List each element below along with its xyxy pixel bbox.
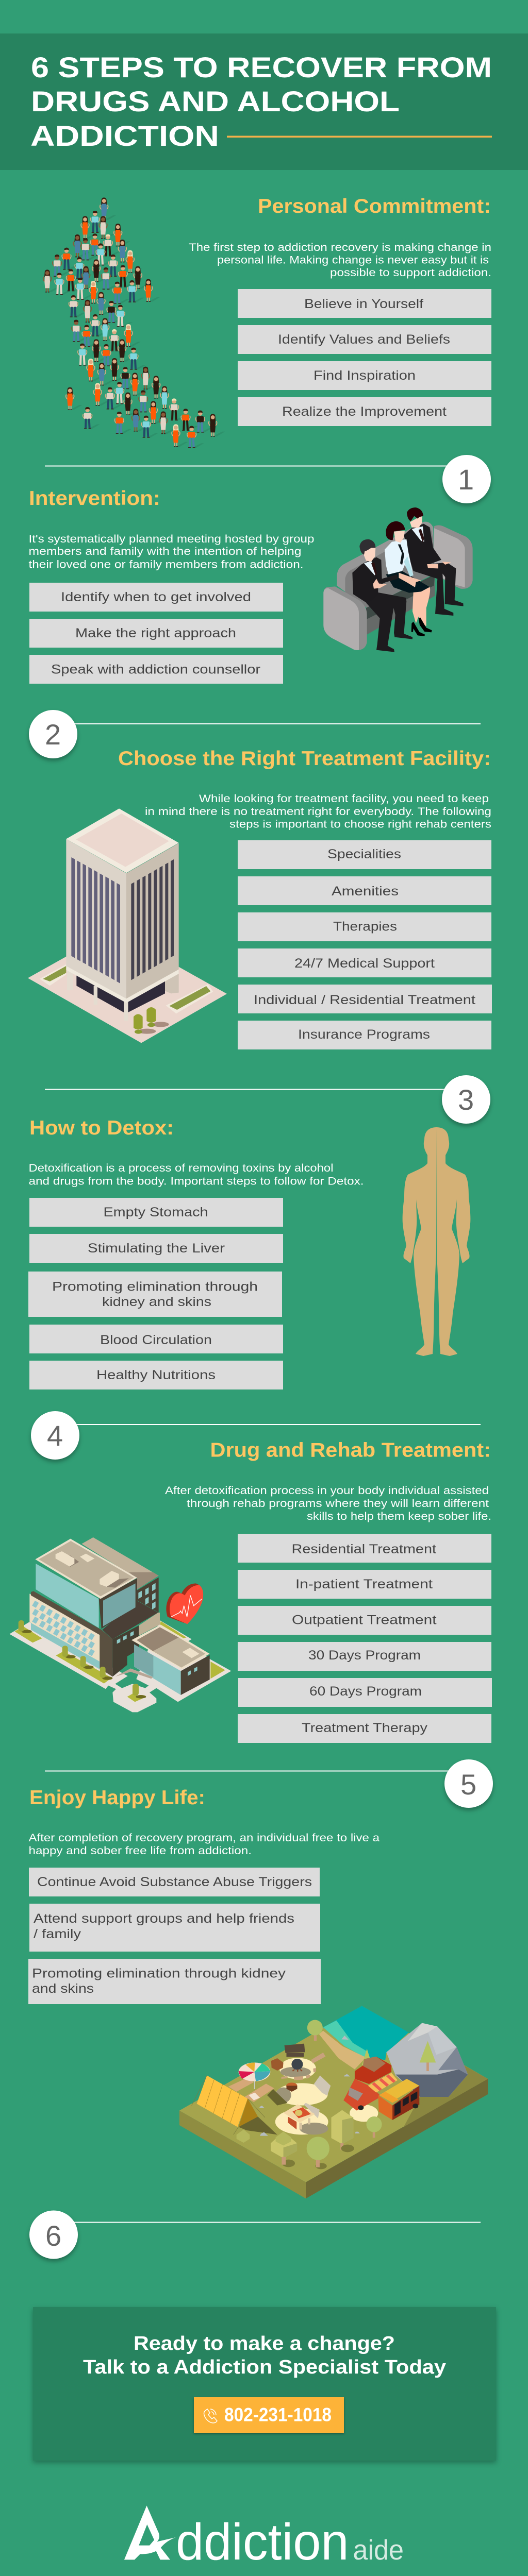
intro text: happy and sober free life from addiction.	[29, 1845, 252, 1857]
list button: Outpatient Treatment	[292, 1613, 437, 1627]
illustration: isometric camp site	[179, 2006, 488, 2198]
intro text: It's systematically planned meeting hosted by group	[29, 533, 315, 545]
intro text	[145, 793, 491, 831]
list button	[238, 1606, 491, 1635]
list button: Residential Treatment	[292, 1542, 436, 1556]
list button: Attend support groups and help friends	[34, 1911, 294, 1926]
list button	[28, 1272, 282, 1317]
heading: personal commitment: Personal Commitment:	[258, 195, 491, 217]
list button	[238, 985, 492, 1013]
list button: Realize the Improvement	[282, 404, 447, 419]
list button: kidney and skins	[102, 1295, 211, 1309]
panel: personal commitment	[43, 195, 491, 448]
list button	[238, 325, 491, 354]
list button	[238, 1642, 491, 1671]
list button	[238, 1678, 492, 1707]
list button: Promoting elimination through kidney	[32, 1966, 286, 1980]
list button	[238, 1534, 491, 1563]
intro text: steps is important to choose right rehab centers	[229, 818, 491, 831]
list button: and skins	[32, 1981, 94, 1996]
step 2 marker: 2	[45, 718, 61, 751]
list button: Stimulating the Liver	[88, 1241, 225, 1256]
step 1 marker: 1	[458, 463, 474, 496]
header band	[0, 33, 528, 170]
heading: drug and rehab treatment: Drug and Rehab Treatment:	[210, 1439, 491, 1461]
list button: In-patient Treatment	[295, 1577, 433, 1591]
illustration: hospital building with heart	[9, 1537, 231, 1712]
step 5 marker	[45, 1759, 493, 1808]
list button: Specialities	[327, 847, 401, 861]
step 5 marker: 5	[460, 1768, 476, 1801]
intro text: The first step to addiction recovery is making change in	[189, 242, 491, 253]
step 3 marker: 3	[458, 1083, 474, 1116]
list button	[238, 1570, 491, 1599]
title	[30, 51, 492, 152]
list button: Empty Stomach	[103, 1205, 208, 1219]
phone button	[194, 2397, 344, 2433]
list button: Individual / Residential Treatment	[254, 993, 475, 1007]
list button: Treatment Therapy	[302, 1721, 428, 1735]
heading: treatment facility: Choose the Right Treatment Facility:	[118, 748, 491, 770]
panel: how to detox	[28, 1117, 470, 1389]
title: DRUGS AND ALCOHOL	[31, 85, 400, 117]
title: 6 STEPS TO RECOVER FROM	[31, 51, 492, 83]
intro text: personal life. Making change is never easy but it is	[217, 255, 489, 266]
list button	[238, 1021, 491, 1049]
list button: Make the right approach	[75, 626, 236, 640]
step 1 marker	[45, 455, 491, 503]
intro text: members and family with the intention of helping	[29, 546, 301, 557]
intro text: After completion of recovery program, an individual free to live a	[29, 1832, 380, 1844]
list button: Blood Circulation	[100, 1333, 212, 1347]
panel: intervention	[29, 487, 473, 684]
list button	[29, 1904, 320, 1952]
intro text: through rehab programs where they will learn different	[187, 1498, 489, 1510]
logo: addiction aide: aide	[353, 2534, 404, 2566]
list button: 60 Days Program	[309, 1684, 422, 1699]
intro text: While looking for treatment facility, you need to keep	[199, 793, 489, 805]
intro text	[29, 533, 315, 571]
intro text	[189, 242, 491, 279]
list button	[29, 1361, 283, 1389]
logo mark: letter A	[124, 2505, 176, 2560]
list button: 24/7 Medical Support	[294, 956, 435, 971]
intro text: in mind there is no treatment right for everybody. The following	[145, 806, 491, 818]
heading: intervention: Intervention:	[29, 487, 160, 510]
list button	[29, 655, 283, 684]
step 3 marker	[45, 1075, 490, 1124]
call to action text: Ready to make a change?	[134, 2333, 395, 2354]
list button: Identify Values and Beliefs	[278, 332, 450, 347]
intro text	[29, 1162, 364, 1187]
illustration: three people on a sofa	[323, 507, 473, 652]
list button: / family	[34, 1927, 81, 1941]
list button	[238, 840, 491, 869]
illustration: office tower	[28, 808, 227, 1043]
logo: addiction aide: ddiction	[176, 2513, 349, 2571]
intro text: and drugs from the body. Important steps to follow for Detox.	[29, 1176, 364, 1187]
list button: 30 Days Program	[308, 1648, 421, 1663]
intro text	[29, 1832, 380, 1857]
intro text: skills to help them keep sober life.	[307, 1511, 491, 1522]
step 2 marker	[29, 710, 481, 758]
crowd of people forming an arrow	[43, 197, 225, 448]
intro text: After detoxification process in your body individual assisted	[165, 1485, 489, 1497]
list button: Promoting elimination through	[52, 1280, 258, 1294]
list button: Believe in Yourself	[304, 297, 423, 311]
step 4 marker	[31, 1411, 481, 1460]
intro text: Detoxification is a process of removing toxins by alcohol	[29, 1162, 333, 1174]
list button: Therapies	[333, 919, 397, 934]
intro text	[165, 1485, 491, 1522]
intro text: possible to support addiction.	[330, 267, 491, 279]
icon: phone	[204, 2409, 217, 2423]
call to action text	[83, 2333, 446, 2378]
list button: Amenities	[332, 884, 399, 899]
list button	[238, 397, 491, 426]
list button	[29, 583, 283, 612]
list button	[238, 948, 491, 977]
intro text: their loved one or family members from addiction.	[29, 558, 303, 571]
panel: choose the right treatment facility	[28, 748, 492, 1049]
panel: drug and rehab treatment	[9, 1439, 492, 1743]
title: ADDICTION	[30, 120, 219, 152]
list button	[29, 1198, 283, 1227]
call to action text: Talk to a Addiction Specialist Today	[83, 2357, 446, 2378]
list button	[29, 1234, 283, 1263]
list button: Find Inspiration	[314, 368, 416, 383]
step 4 marker: 4	[47, 1419, 63, 1452]
list button	[29, 1325, 283, 1353]
heading: how to detox: How to Detox:	[29, 1117, 174, 1139]
list button	[29, 619, 283, 648]
step 6 marker: 6	[45, 2219, 61, 2252]
heading: enjoy happy life: Enjoy Happy Life:	[29, 1787, 205, 1809]
panel: enjoy happy life	[28, 1787, 488, 2198]
list button	[29, 1868, 320, 1896]
list button	[238, 361, 491, 390]
list button	[238, 289, 491, 318]
list button: Speak with addiction counsellor	[51, 663, 260, 677]
step 6 marker	[29, 2210, 481, 2259]
logo: addiction aide	[124, 2505, 404, 2571]
list button: Continue Avoid Substance Abuse Triggers	[37, 1875, 312, 1889]
panel: call to action	[33, 2307, 496, 2461]
list button	[238, 1714, 491, 1743]
list button: Identify when to get involved	[61, 590, 251, 604]
illustration: human body silhouette	[403, 1127, 470, 1356]
phone number: 802-231-1018	[224, 2404, 332, 2426]
list button: Healthy Nutritions	[96, 1368, 216, 1382]
list button: Insurance Programs	[298, 1027, 430, 1042]
list button	[28, 1959, 321, 2004]
list button	[238, 912, 491, 941]
list button	[238, 876, 491, 905]
